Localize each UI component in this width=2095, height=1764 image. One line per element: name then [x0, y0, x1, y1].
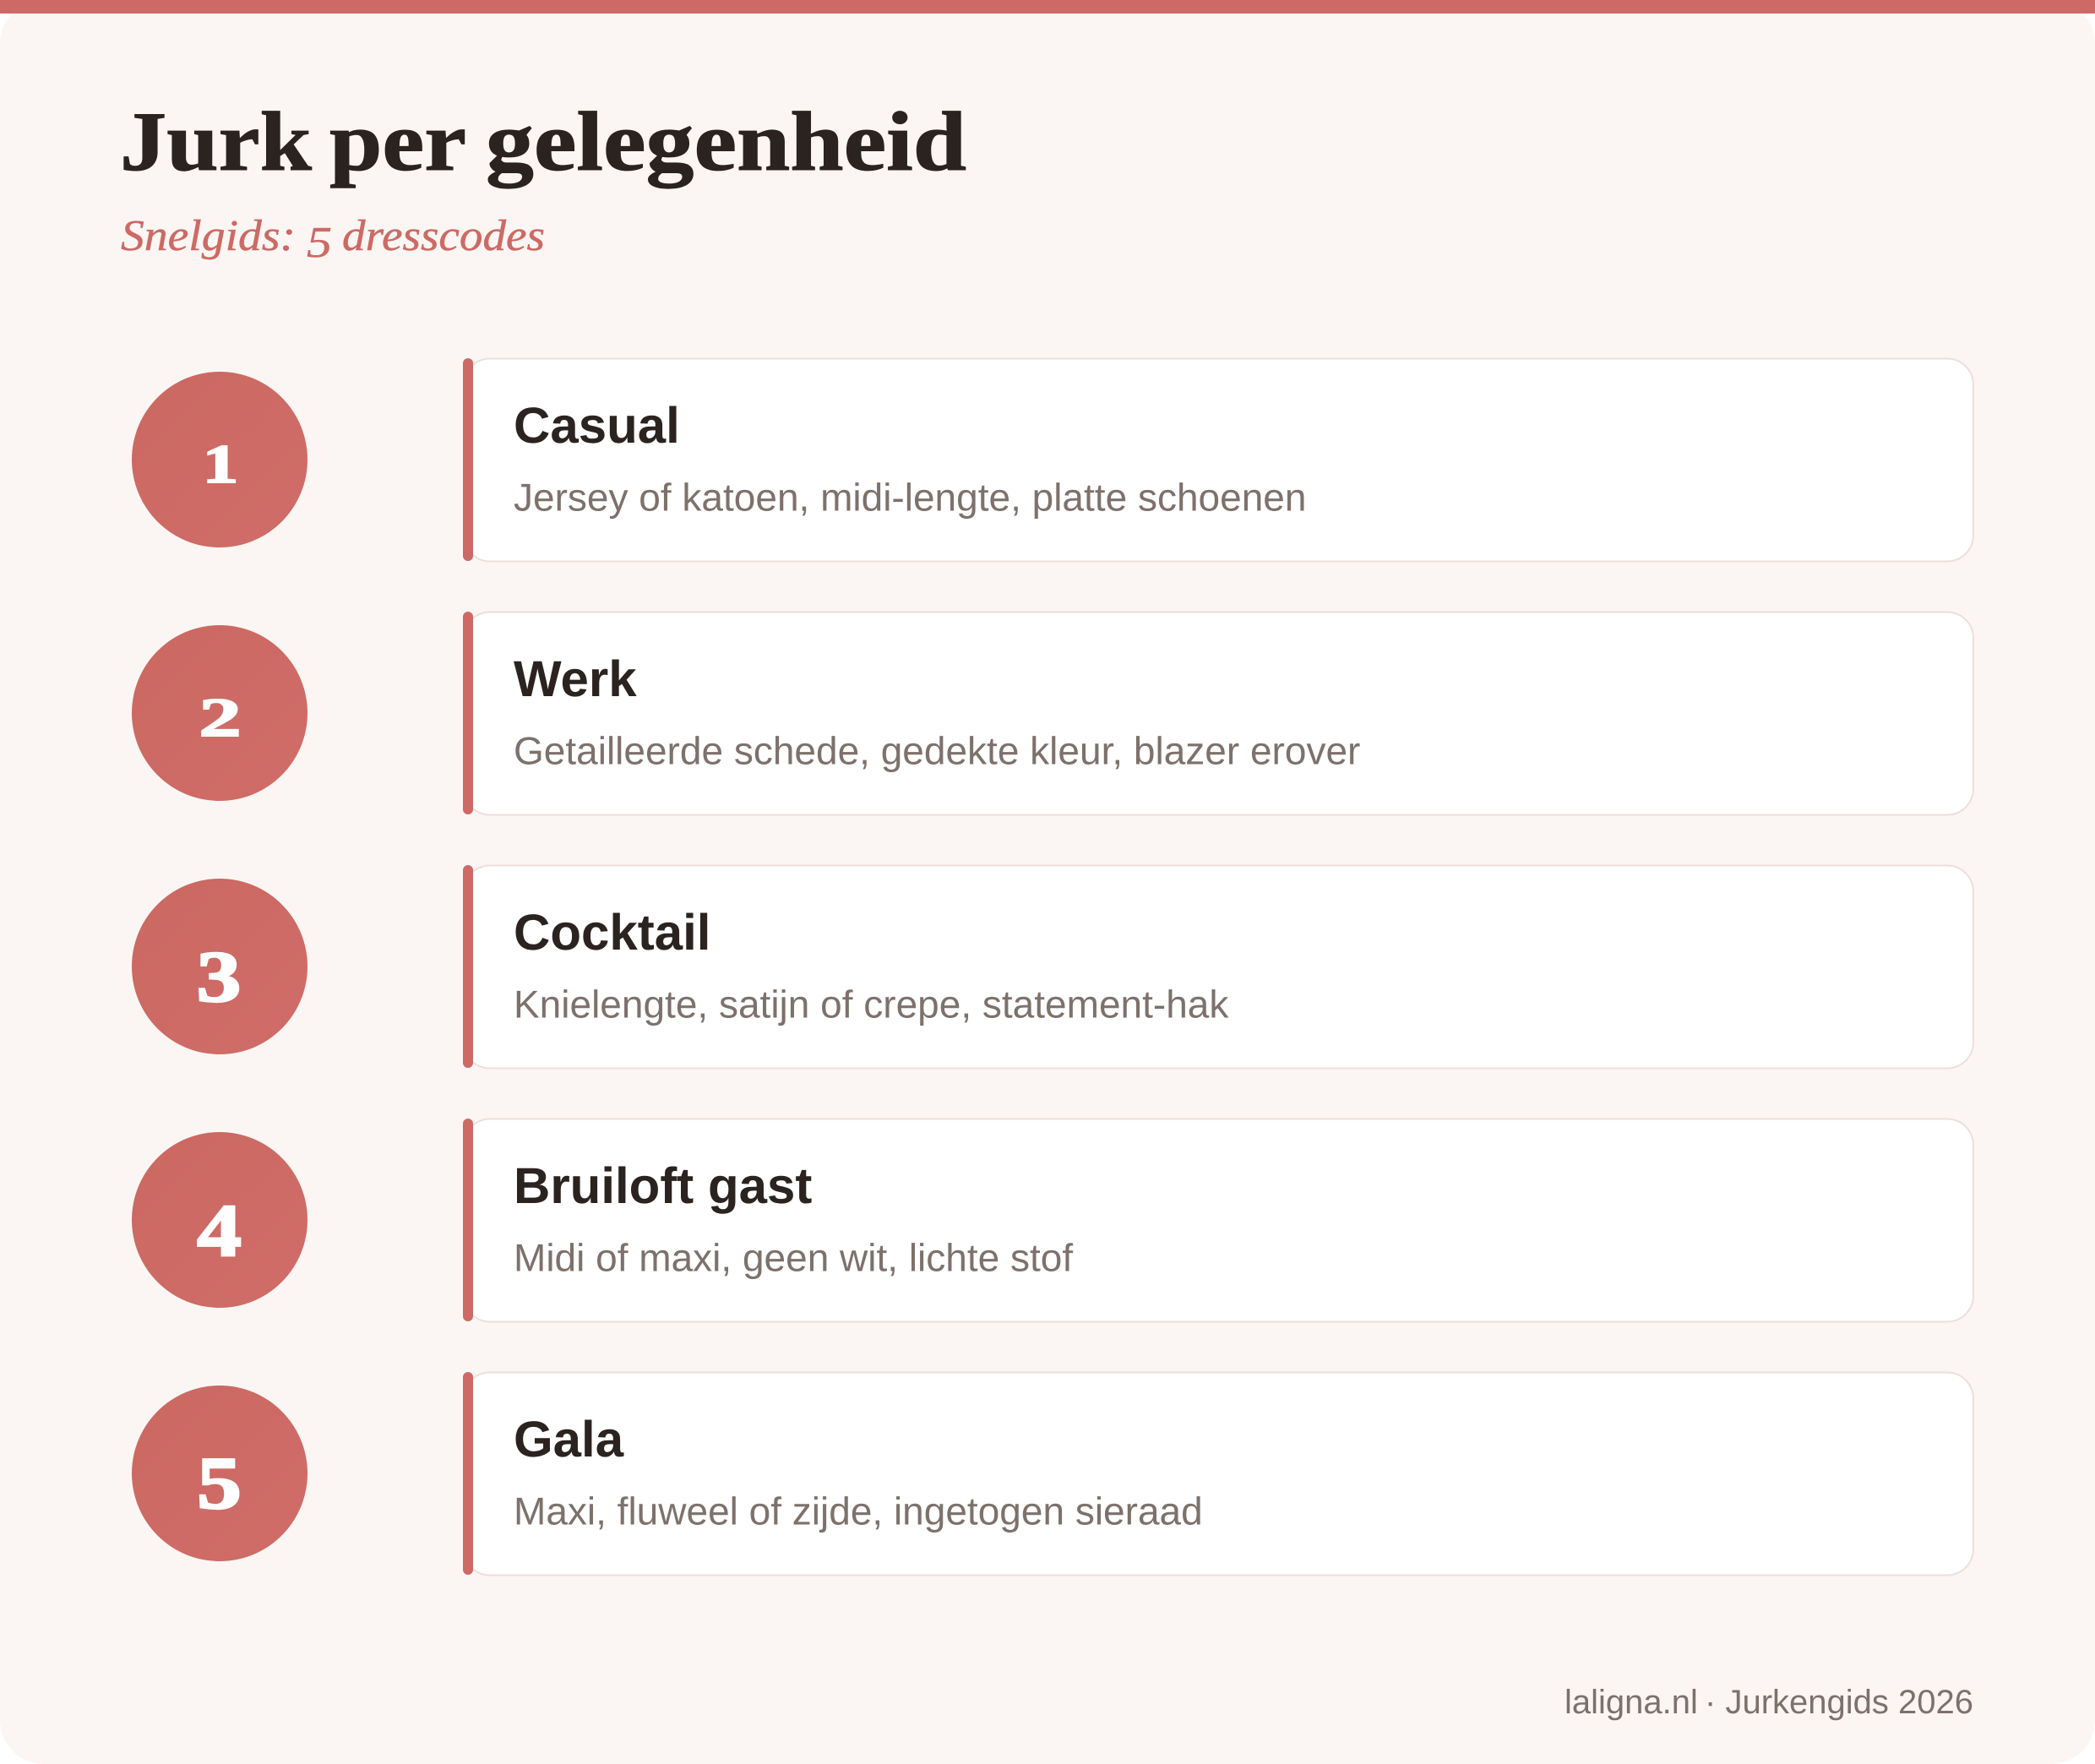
subtitle: dresscodes [342, 212, 545, 260]
card: werk [463, 612, 1973, 814]
footer: laligna.nl · Jurkengids 2026 [1564, 1684, 1973, 1721]
title: Jurk [120, 95, 312, 188]
top accent bar [0, 0, 2095, 14]
number badge 3 [132, 879, 307, 1054]
title [120, 95, 966, 189]
number badge 5 [132, 1386, 307, 1561]
card: cocktail [463, 865, 1973, 1068]
number badge 3: 3 [197, 936, 241, 1017]
subtitle: 5 [307, 219, 332, 267]
card: gala: Gala [514, 1411, 624, 1467]
card: casual [463, 358, 1973, 561]
card: gala: Maxi, fluweel of zijde, ingetogen sieraad [514, 1489, 1203, 1533]
card: gala [463, 1372, 1973, 1575]
number badge 1: 1 [203, 433, 238, 494]
step 5: gala [132, 1372, 1973, 1575]
card: bruiloft gast [463, 1119, 1973, 1321]
step 1: casual [132, 358, 1973, 561]
card: casual: Casual [514, 397, 680, 454]
title: gelegenheid [486, 95, 966, 189]
card: bruiloft gast: Midi of maxi, geen wit, lichte stof [514, 1235, 1073, 1279]
card: cocktail: Knielengte, satijn of crepe, statement-hak [514, 982, 1229, 1026]
number badge 5: 5 [197, 1442, 242, 1524]
step 2: werk [132, 612, 1973, 814]
card: werk: Werk [514, 651, 637, 707]
number badge 2 [132, 625, 307, 801]
title: per [329, 95, 466, 188]
step 4: bruiloft gast [132, 1119, 1973, 1321]
card: cocktail: Cocktail [514, 904, 710, 961]
subtitle [121, 212, 545, 267]
number badge 4: 4 [197, 1190, 242, 1271]
card: casual: Jersey of katoen, midi-lengte, platte schoenen [514, 475, 1306, 519]
step 3: cocktail [132, 865, 1973, 1068]
number badge 1 [132, 372, 307, 547]
card: werk: Getailleerde schede, gedekte kleur, blazer erover [514, 728, 1360, 772]
number badge 4 [132, 1132, 307, 1308]
card: bruiloft gast: Bruiloft gast [514, 1157, 812, 1214]
subtitle: Snelgids: [121, 212, 296, 260]
number badge 2: 2 [199, 687, 242, 748]
